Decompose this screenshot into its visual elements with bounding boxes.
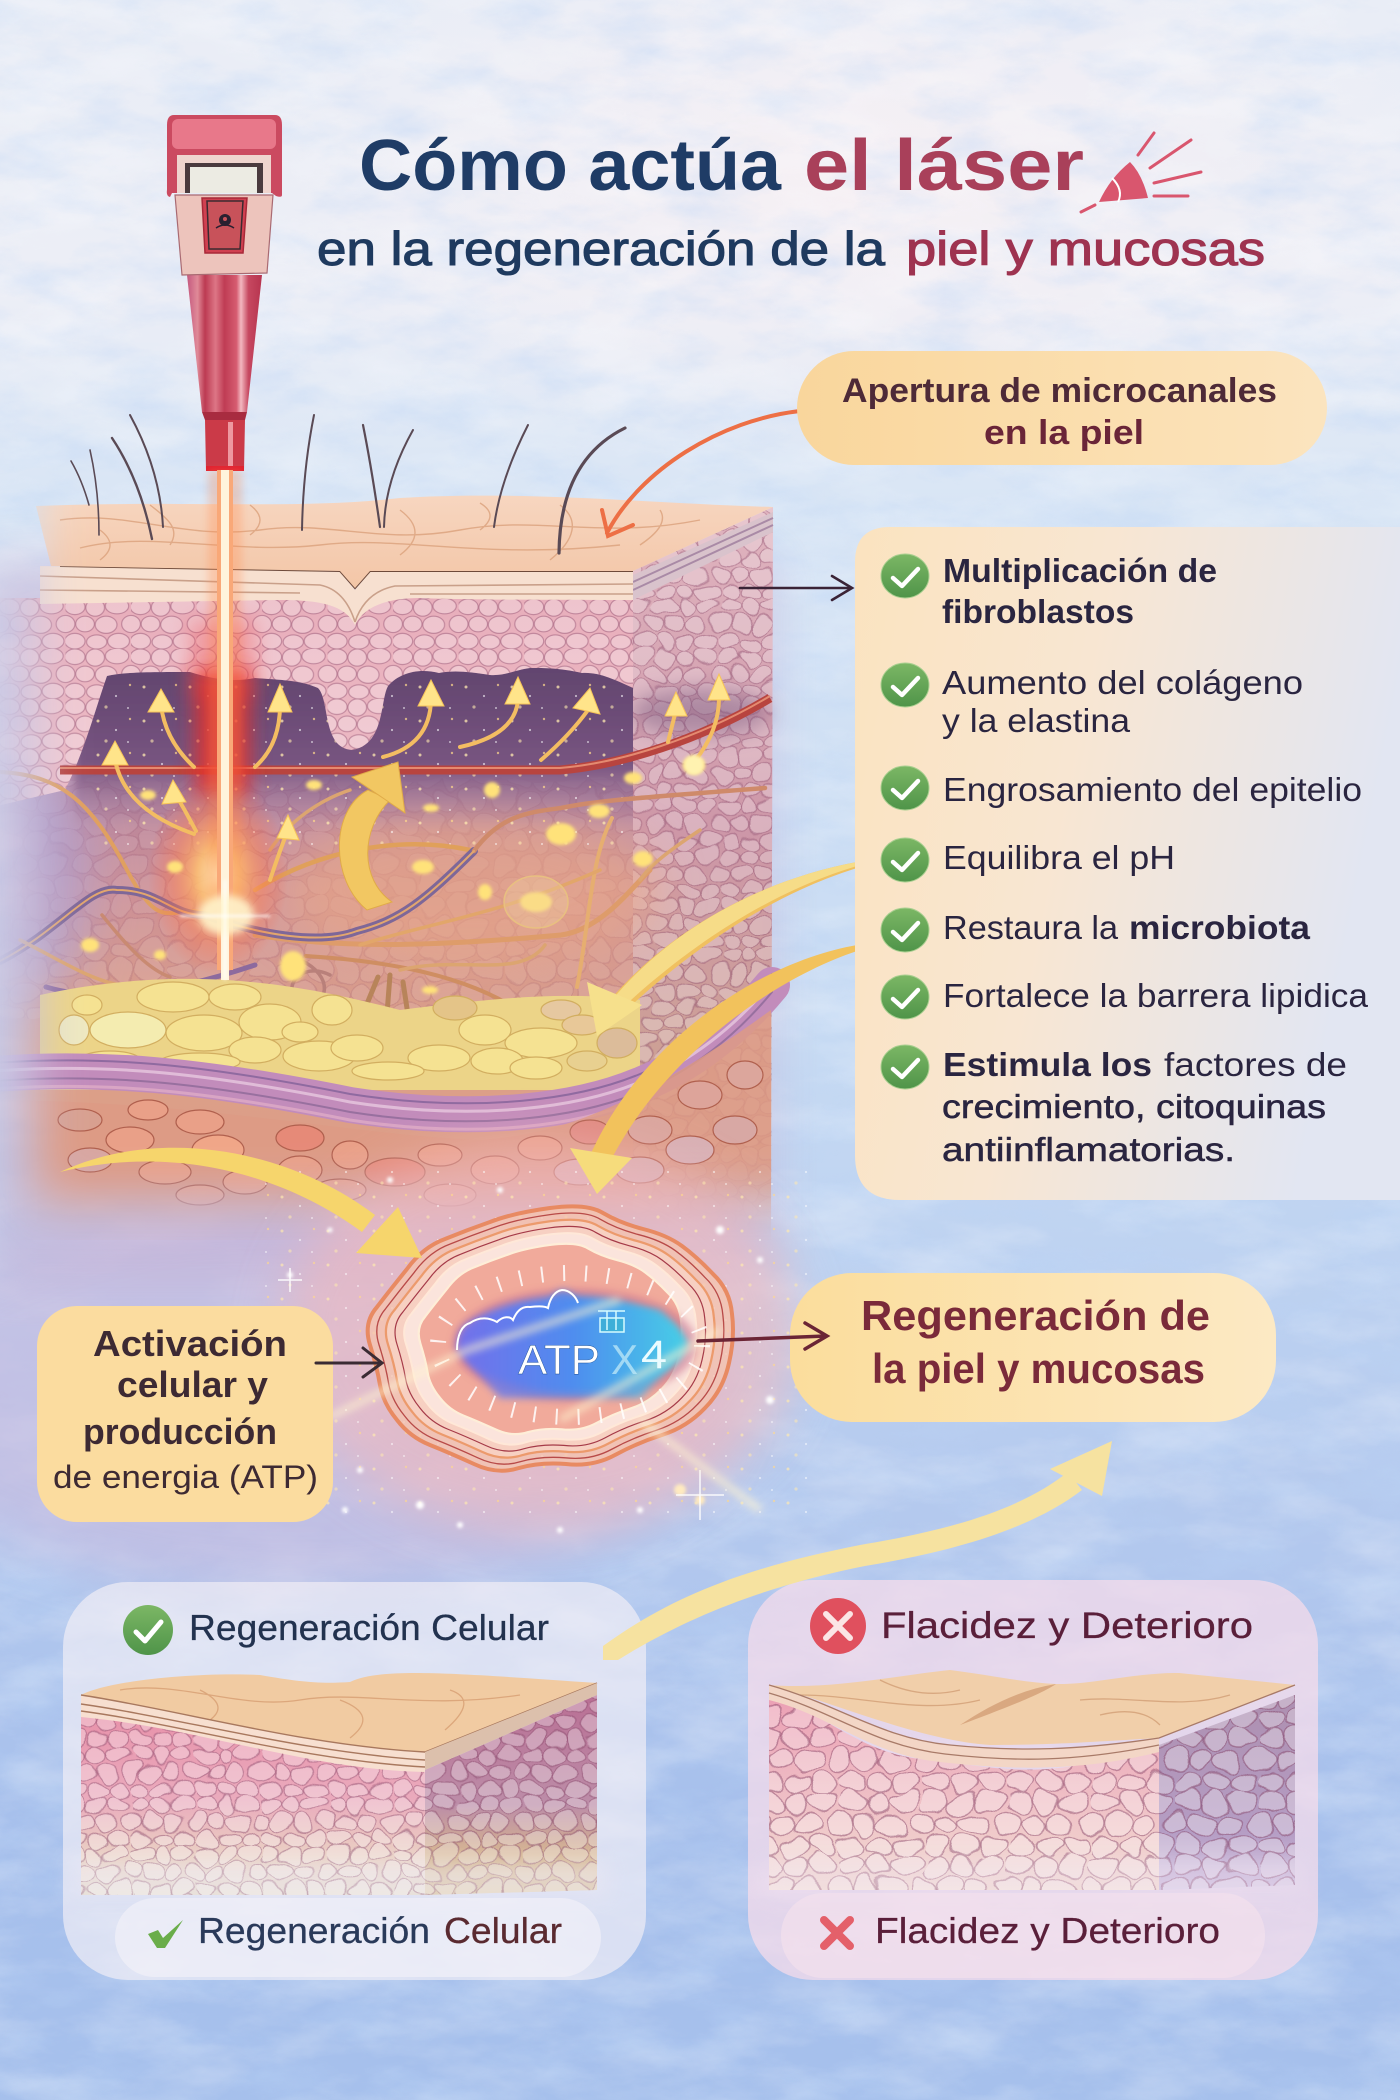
pill: regeneración celular: Regeneración	[198, 1910, 430, 1951]
epidermis stripe	[40, 566, 633, 625]
sparkles	[287, 1177, 774, 1533]
X4 label: X	[611, 1336, 638, 1383]
heading: Flacidez y Deterioro	[881, 1605, 1253, 1646]
callout: microcanales: en la piel	[984, 414, 1144, 452]
checklist text: Aumento del colágeno	[942, 664, 1303, 701]
callout: activación celular: producción	[83, 1411, 277, 1452]
red laser heat zone	[148, 620, 288, 975]
right side face of skin block	[620, 500, 790, 1240]
checklist text: Estimula los	[943, 1046, 1152, 1083]
nerve fibers	[2, 770, 768, 1010]
concentric wavy rings	[368, 1206, 733, 1471]
title: el láser	[804, 126, 1084, 206]
heading: Regeneración Celular	[189, 1607, 549, 1648]
arrow: activation to burst	[316, 1348, 382, 1377]
checklist text: Equilibra el pH	[943, 839, 1175, 876]
icon: laser beam emitter	[1081, 133, 1201, 212]
callout: activación celular: de energia (ATP)	[53, 1459, 318, 1495]
laser beam	[180, 470, 270, 980]
light streaks	[330, 1300, 760, 1510]
X4 label	[611, 1333, 667, 1383]
top skin surface	[36, 496, 773, 588]
large curved yellow arrow	[339, 762, 405, 910]
callout: regeneración: Regeneración de	[861, 1292, 1210, 1339]
front dermis	[0, 740, 660, 1240]
fat globules	[40, 979, 640, 1090]
callout: activación celular	[37, 1306, 333, 1522]
callout: microcanales: Apertura de microcanales	[842, 372, 1277, 410]
head cap	[167, 115, 282, 197]
checklist text: Fortalece la barrera lipidica	[943, 977, 1369, 1014]
aged skin block	[760, 1670, 1305, 1900]
blood vessel	[60, 696, 770, 770]
glowing golden dots	[81, 756, 705, 994]
pink epidermal cell layer with rete ridges	[0, 598, 633, 810]
pink glow	[280, 1140, 800, 1530]
collar	[175, 195, 273, 275]
dark papillary layer	[72, 668, 633, 845]
title: Cómo actúa	[359, 126, 782, 206]
checklist text: y la elastina	[942, 702, 1131, 739]
icon: green check	[123, 1605, 173, 1655]
pill: flacidez: Flacidez y Deterioro	[875, 1910, 1220, 1951]
haze behind skin block	[0, 560, 770, 1280]
hairs	[71, 415, 625, 553]
yellow arrow to ATP burst	[570, 945, 857, 1194]
ATP label: ATP	[518, 1336, 600, 1383]
small glowing arrows rising through dermis	[102, 674, 730, 880]
yellow arrow up to regeneration	[603, 1441, 1112, 1660]
callout: activación celular: celular y	[117, 1364, 268, 1405]
pill: regeneración celular: Celular	[444, 1910, 562, 1951]
checklist text: factores de	[1164, 1046, 1347, 1083]
dark arrow to checklist	[740, 576, 852, 600]
checklist text: crecimiento, citoquinas	[942, 1088, 1326, 1125]
radiating ticks	[438, 1273, 702, 1417]
callout: regeneración	[790, 1273, 1276, 1422]
panel: regeneración celular	[63, 1582, 646, 1980]
checklist text: Restaura la	[943, 909, 1119, 946]
healthy skin block	[70, 1673, 610, 1900]
barrel	[187, 275, 262, 412]
pill: flacidez	[781, 1893, 1265, 1978]
checklist text: Engrosamiento del epitelio	[943, 771, 1362, 808]
checklist text: antiinflamatorias.	[942, 1131, 1235, 1168]
subtitle: piel y mucosas	[906, 222, 1265, 275]
checklist text	[942, 552, 1369, 1168]
title	[359, 126, 1084, 206]
blue core	[453, 1289, 697, 1401]
laser handpiece	[167, 115, 282, 471]
energy burst: ATP	[265, 1140, 815, 1533]
icon: green checks	[881, 554, 929, 1089]
orange arrow to skin surface	[602, 411, 800, 536]
callout: microcanales	[797, 351, 1327, 465]
arrow: burst to regeneration	[698, 1323, 827, 1349]
yellow arrow into burst from left	[60, 1148, 422, 1258]
callout: activación celular: Activación	[93, 1323, 287, 1364]
lower cell layer	[0, 1010, 771, 1240]
checklist text: microbiota	[1129, 909, 1311, 946]
icon: red x	[810, 1598, 866, 1654]
muscle band	[0, 974, 772, 1129]
skin cross-section illustration	[0, 415, 790, 1280]
checklist text: fibroblastos	[942, 593, 1134, 630]
tip	[202, 412, 247, 471]
yellow arrow to fat layer	[587, 862, 857, 1036]
small teal glyph	[598, 1311, 625, 1332]
checklist text: Multiplicación de	[943, 552, 1217, 589]
panel: flacidez y deterioro	[748, 1580, 1318, 1980]
pill: regeneración celular	[115, 1898, 601, 1977]
subtitle	[317, 222, 1265, 275]
callout: regeneración: la piel y mucosas	[872, 1345, 1205, 1392]
display badge	[202, 198, 247, 253]
panel: benefits checklist	[855, 527, 1400, 1200]
X4 label: 4	[641, 1333, 667, 1377]
subtitle: en la regeneración de la	[317, 222, 886, 275]
